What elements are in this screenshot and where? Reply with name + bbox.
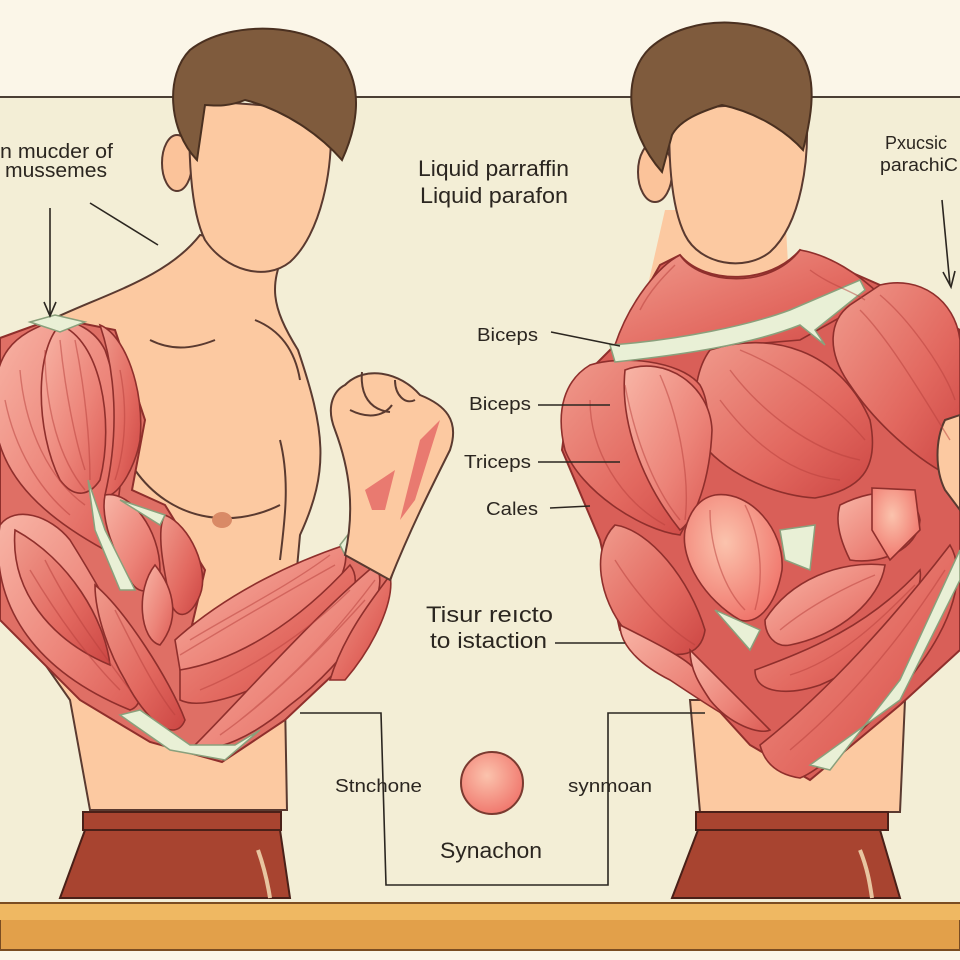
label: biceps 1	[477, 325, 620, 346]
right tendons	[610, 280, 960, 770]
label: stnchone: Stnchone	[335, 776, 422, 796]
left torso	[0, 235, 320, 810]
left arm underlay	[0, 318, 392, 762]
table bar	[0, 903, 960, 960]
label: top right note	[880, 133, 958, 175]
right hand skin	[938, 415, 960, 510]
label: top right note: parachiC	[880, 155, 958, 175]
label: liquid paraffin: Liquid parafon	[420, 183, 568, 208]
label: liquid paraffin	[418, 156, 569, 208]
label: top left note: mussemes	[5, 160, 107, 182]
left face	[189, 100, 331, 272]
ball	[461, 752, 523, 814]
label: triceps: Triceps	[464, 452, 531, 472]
right muscles	[561, 250, 960, 780]
label: tissue reaction: Tisur reıcto	[426, 602, 553, 627]
label: top right note: Pxucsic	[885, 133, 947, 153]
left nipple	[212, 512, 232, 528]
label: cales: Cales	[486, 499, 538, 519]
right figure	[561, 23, 960, 898]
synovial bracket	[300, 713, 705, 885]
label: synachon: Synachon	[440, 838, 542, 863]
arrow: down to shoulder	[44, 208, 56, 316]
label: synmoan: synmoan	[568, 776, 652, 796]
right face	[669, 100, 807, 263]
left chest lines	[135, 320, 300, 560]
label: top left note	[0, 141, 113, 182]
arrow: top right down	[942, 200, 955, 287]
left tendons	[30, 315, 400, 760]
label: biceps 1: Biceps	[477, 325, 538, 345]
right ear	[638, 142, 672, 202]
right neck	[640, 210, 790, 320]
right mass underlay	[562, 250, 960, 780]
left arm muscles	[0, 315, 400, 762]
label: tissue reaction	[426, 602, 625, 653]
left ear	[162, 135, 192, 191]
label: top left note: n mucder of	[0, 141, 113, 163]
left muscle fibres	[5, 340, 375, 735]
left figure	[0, 29, 453, 898]
right torso base	[690, 700, 905, 812]
right shorts	[672, 812, 900, 898]
arrow line: to neck	[90, 203, 158, 245]
left fist	[331, 372, 453, 580]
label: tissue reaction: to istaction	[430, 628, 547, 653]
right muscle fibres	[590, 265, 955, 750]
left waistband and shorts	[60, 812, 290, 898]
label: cales	[486, 499, 590, 519]
label: biceps 2: Biceps	[469, 394, 531, 414]
right hair	[631, 23, 812, 172]
label: liquid paraffin: Liquid parraffin	[418, 156, 569, 181]
left hair	[173, 29, 356, 160]
